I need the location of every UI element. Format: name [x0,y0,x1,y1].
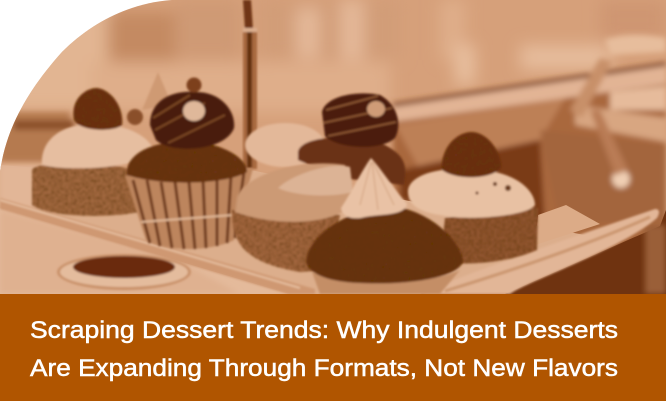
title: Are Expanding Through Formats, Not New Flavors [30,355,618,382]
title band [0,294,666,401]
tray surface [0,165,600,294]
title [30,317,618,382]
photo: desserts on a tray, orange duotone [0,0,666,294]
blurred cafe background [0,0,666,112]
dark area lower right [505,210,666,294]
tray edge right [420,209,659,294]
right berry cake [408,132,538,264]
choux pastry with meringue [306,158,463,294]
back swirl cake [245,93,405,185]
caramel cake [232,163,356,272]
table foreground [0,208,290,294]
tray front edge left [0,198,315,294]
title: Scraping Dessert Trends: Why Indulgent Desserts [30,317,618,344]
window sill and dark right area [0,35,666,294]
stand pole [243,0,257,169]
left berry cake [32,72,172,216]
table hole [57,254,191,290]
cupcake [125,78,253,249]
